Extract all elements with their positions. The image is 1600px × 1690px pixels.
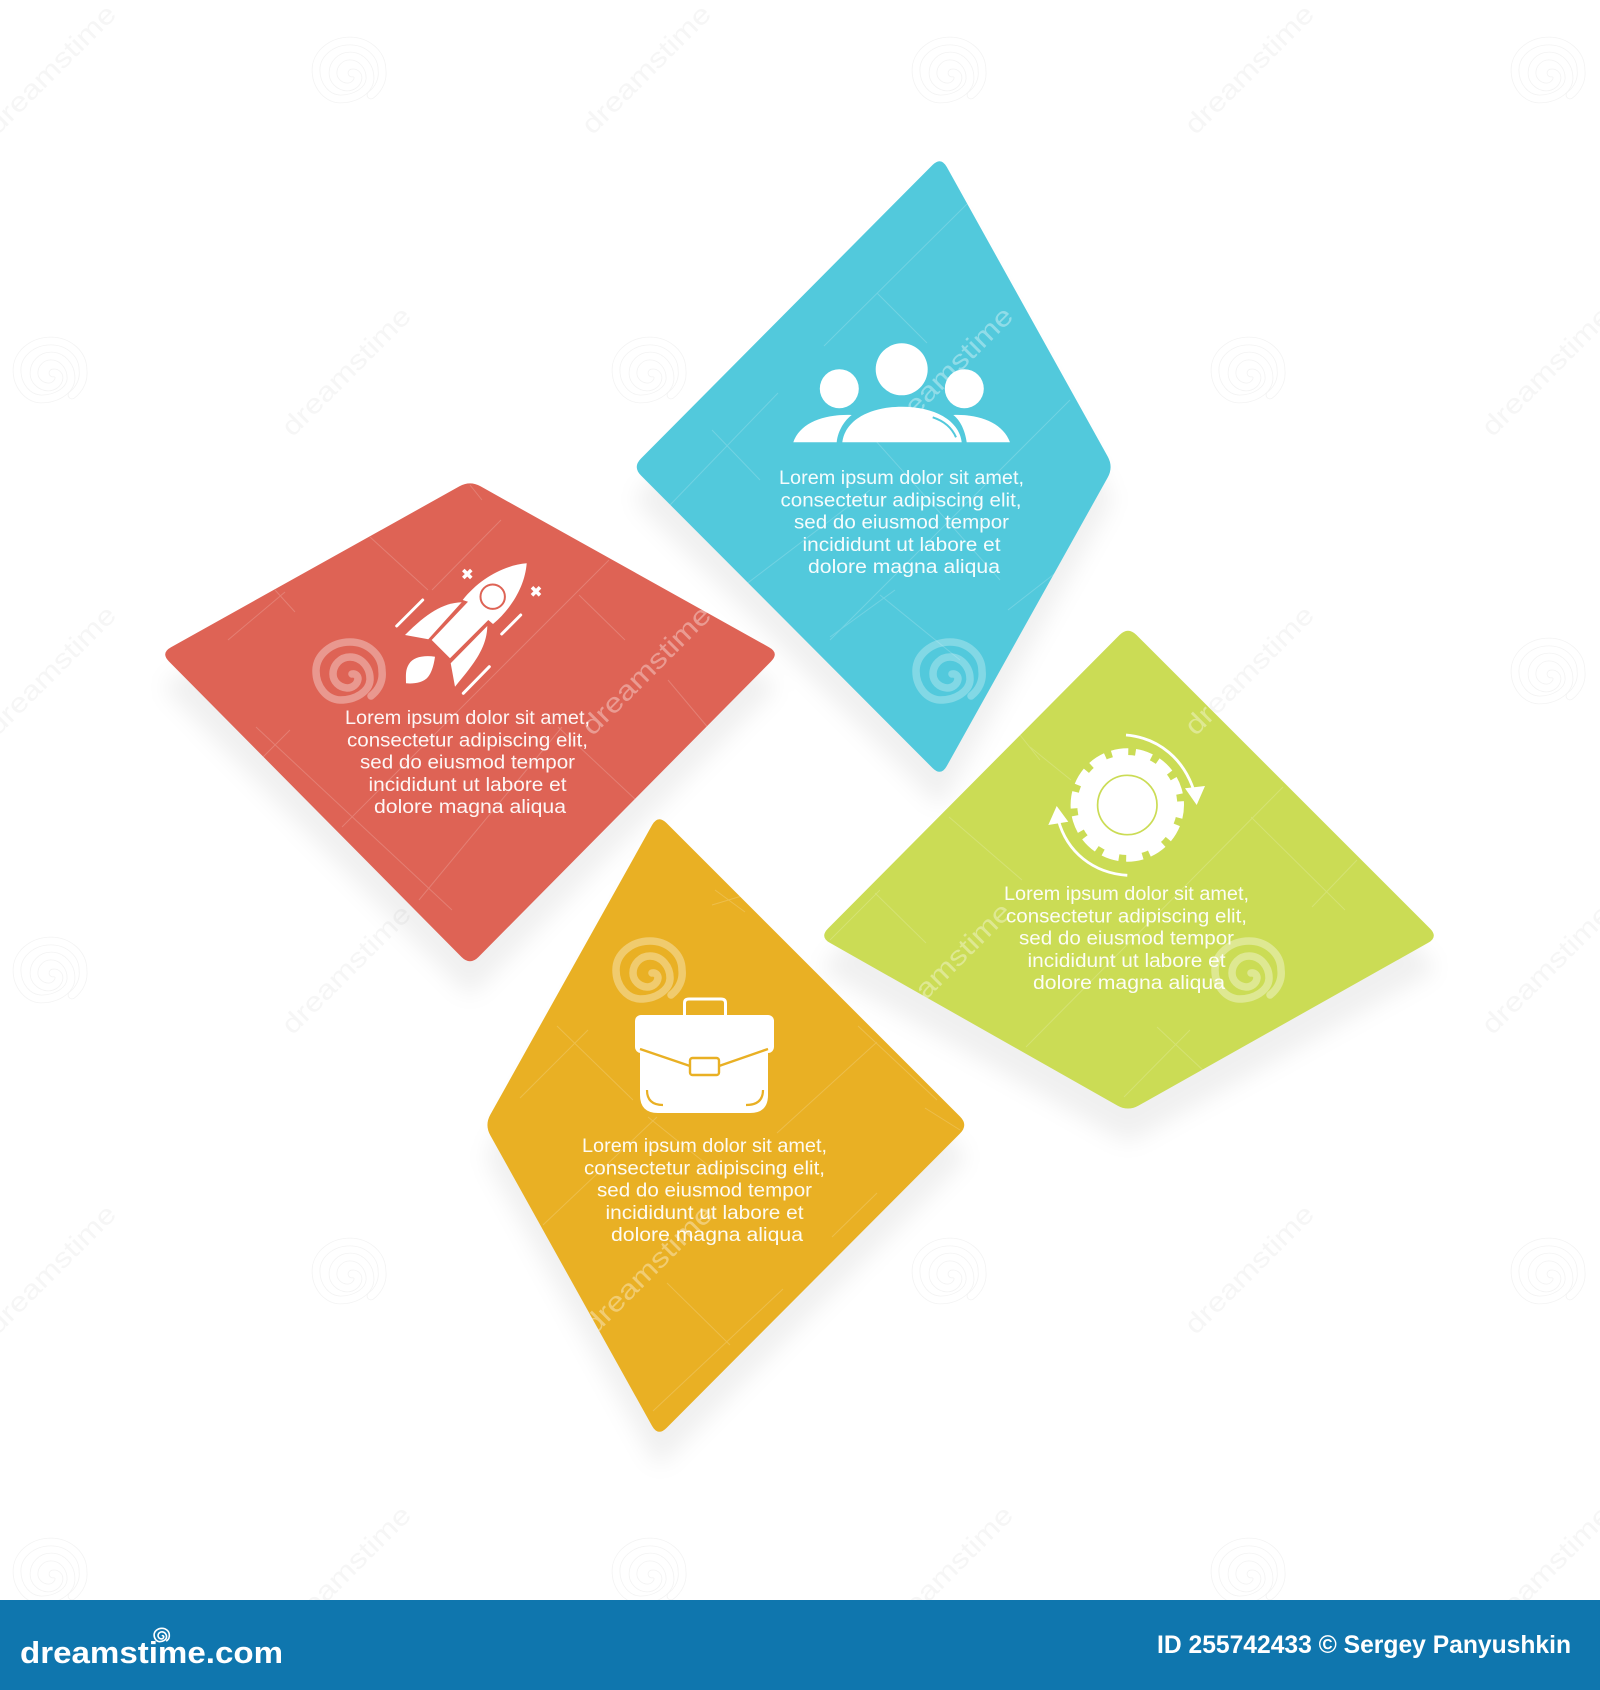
- background watermark pattern: dreamstime: [1179, 0, 1320, 140]
- text block: yellow: sed do eiusmod tempor: [597, 1181, 813, 1202]
- footer credit: ID 255742433 © Sergey Panyushkin: [1157, 1631, 1571, 1659]
- text block: red: consectetur adipiscing elit,: [347, 730, 588, 751]
- text block: green: dolore magna aliqua: [1033, 973, 1225, 994]
- text block: blue: Lorem ipsum dolor sit amet,: [779, 468, 1024, 489]
- text block: blue: consectetur adipiscing elit,: [780, 490, 1022, 511]
- panel: yellow briefcase: dreamstime: [876, 897, 1017, 1038]
- red diamond shape: [165, 483, 775, 961]
- background watermark pattern: dreamstime: [1179, 600, 1320, 741]
- text block: red: incididunt ut labore et: [368, 775, 567, 796]
- background watermark pattern: dreamstime: [276, 899, 417, 1040]
- text block: green: incididunt ut labore et: [1028, 951, 1226, 972]
- text block: blue: [779, 468, 1024, 578]
- panel: yellow briefcase: dreamstime: [578, 1199, 719, 1340]
- background watermark pattern: dreamstime: [1476, 1500, 1600, 1641]
- background watermark pattern: dreamstime: [1476, 899, 1600, 1040]
- text block: red: [345, 708, 590, 818]
- text block: green: sed do eiusmod tempor: [1019, 929, 1235, 950]
- background watermark pattern: dreamstime: [1179, 1199, 1320, 1340]
- background watermark pattern: dreamstime: [276, 1500, 417, 1641]
- icon: briefcase: [635, 999, 774, 1113]
- background watermark pattern: dreamstime: [878, 1500, 1019, 1641]
- text block: blue: incididunt ut labore et: [802, 535, 1001, 556]
- background watermark pattern: dreamstime: [276, 301, 417, 442]
- panel: red rocket: dreamstime: [576, 600, 717, 741]
- panel: red rocket: [165, 483, 775, 1040]
- panel: blue team: dreamstime: [878, 301, 1019, 442]
- text block: green: [1004, 884, 1249, 994]
- text block: blue: sed do eiusmod tempor: [794, 513, 1010, 534]
- text block: green: consectetur adipiscing elit,: [1006, 906, 1247, 927]
- panel: green gear: dreamstime: [876, 897, 1017, 1038]
- text block: yellow: dolore magna aliqua: [611, 1225, 803, 1246]
- panel: red rocket: dreamstime: [276, 899, 417, 1040]
- text block: red: dolore magna aliqua: [374, 797, 566, 818]
- text block: red: sed do eiusmod tempor: [360, 753, 576, 774]
- text block: yellow: incididunt ut labore et: [606, 1203, 804, 1224]
- text block: green: Lorem ipsum dolor sit amet,: [1004, 884, 1249, 905]
- footer bar: [0, 1600, 1600, 1690]
- green diamond shape: [824, 631, 1434, 1109]
- footer logo: dreamstime.com: dreamstime.com: [20, 1635, 283, 1670]
- panel: yellow briefcase: [487, 819, 1017, 1432]
- panel: blue team: [637, 161, 1111, 772]
- text block: yellow: consectetur adipiscing elit,: [584, 1158, 825, 1179]
- blue diamond shape: [637, 161, 1111, 772]
- background watermark pattern: dreamstime: [1476, 301, 1600, 442]
- yellow diamond shape: [487, 819, 964, 1432]
- text block: blue: dolore magna aliqua: [808, 557, 1000, 578]
- panel: green gear: [824, 600, 1434, 1109]
- panel drop shadows: [165, 193, 1434, 1464]
- text block: yellow: Lorem ipsum dolor sit amet,: [582, 1136, 827, 1157]
- icon: gear with arrows: [1048, 735, 1205, 875]
- background watermark pattern: dreamstime: [576, 0, 717, 140]
- icon: people group: [793, 343, 1010, 442]
- text block: yellow: [582, 1136, 827, 1246]
- panel: green gear: dreamstime: [1179, 600, 1320, 741]
- icon: rocket: [397, 563, 540, 693]
- text block: red: Lorem ipsum dolor sit amet,: [345, 708, 590, 729]
